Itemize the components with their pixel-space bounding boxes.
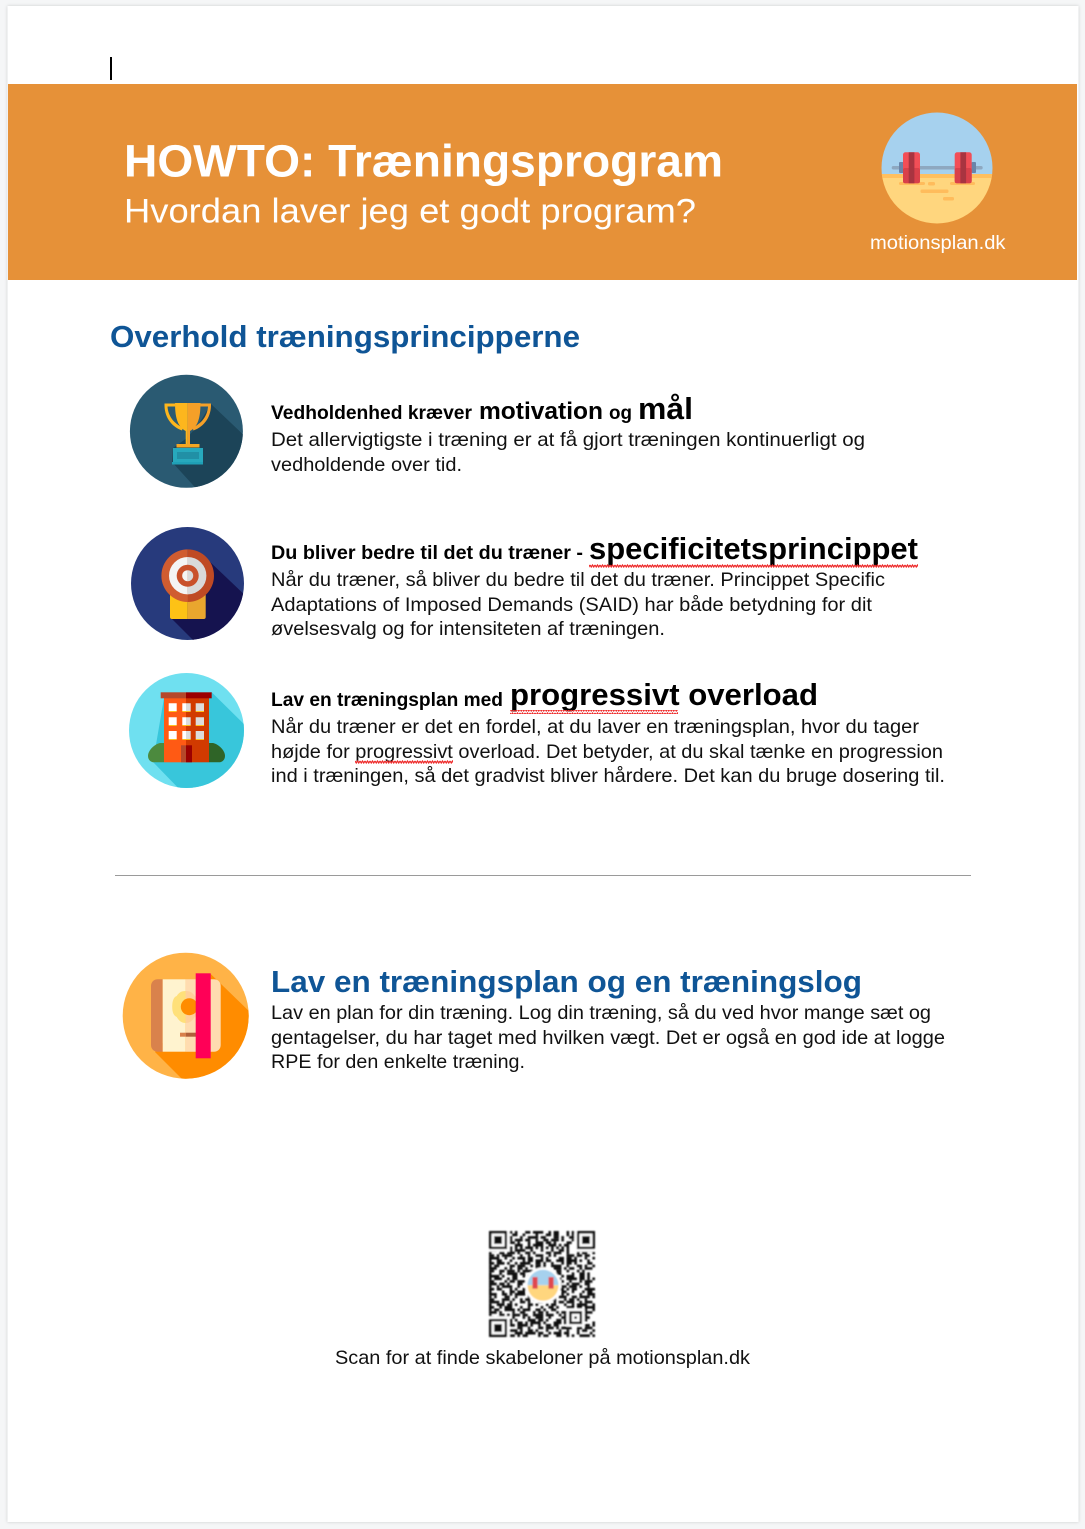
body text: Når du træner, så bliver du bedre til det du træner. Princippet Specific xyxy=(271,569,885,591)
icon: building xyxy=(129,673,244,788)
heading: Lav en træningsplan og en træningslog xyxy=(271,964,862,999)
body text: Det allervigtigste i træning er at få gjort træningen kontinuerligt og xyxy=(271,429,865,451)
heading line xyxy=(271,531,918,568)
icon: notebook xyxy=(123,953,255,1085)
section: plan and log xyxy=(123,953,945,1085)
body text xyxy=(271,716,945,787)
body text: gentagelser, du har taget med hvilken vægt. Det er også en god ide at logge xyxy=(271,1027,945,1049)
body text: vedholdende over tid. xyxy=(271,454,462,476)
heading line: motivation xyxy=(479,398,603,425)
text cursor xyxy=(110,57,112,80)
heading line: specificitetsprincippet xyxy=(589,531,918,566)
principle 2: specificity xyxy=(131,527,918,645)
header banner xyxy=(8,84,1077,280)
body text: højde for progressivt overload. Det betyder, at du skal tænke en progression xyxy=(271,741,943,763)
heading line: Lav en træningsplan med xyxy=(271,690,503,711)
icon: trophy xyxy=(130,374,243,488)
body text: Adaptations of Imposed Demands (SAID) har både betydning for dit xyxy=(271,594,873,616)
icon: target xyxy=(131,527,250,645)
heading line xyxy=(271,677,818,714)
QR code xyxy=(488,1230,596,1338)
QR caption: Scan for at finde skabeloner på motionsplan.dk xyxy=(335,1347,750,1369)
principle 1: motivation xyxy=(130,375,865,495)
heading line: mål xyxy=(638,391,693,426)
heading line: Du bliver bedre til det du træner - xyxy=(271,543,583,564)
principle 3: progressive overload xyxy=(129,673,945,795)
subtitle: Hvordan laver jeg et godt program? xyxy=(124,193,696,231)
icon: barbell on beach logo xyxy=(880,110,995,226)
body text: RPE for den enkelte træning. xyxy=(271,1051,525,1073)
body text xyxy=(271,429,865,476)
body text xyxy=(271,1002,945,1073)
body text: Når du træner er det en fordel, at du laver en træningsplan, hvor du tager xyxy=(271,716,920,738)
body text xyxy=(271,569,885,640)
logo caption: motionsplan.dk xyxy=(870,233,1006,254)
heading line: og xyxy=(609,403,632,424)
body text: ind i træningen, så det gradvist bliver hårdere. Det kan du bruge dosering til. xyxy=(271,765,945,787)
heading: principles: Overhold træningsprincipperne xyxy=(110,319,580,354)
body text: Lav en plan for din træning. Log din træning, så du ved hvor mange sæt og xyxy=(271,1002,931,1024)
heading line xyxy=(271,391,693,426)
heading line: progressivt overload xyxy=(510,677,818,712)
heading line: Vedholdenhed kræver xyxy=(271,403,473,424)
title: HOWTO: Træningsprogram xyxy=(124,136,723,186)
body text: øvelsesvalg og for intensiteten af træningen. xyxy=(271,618,665,640)
